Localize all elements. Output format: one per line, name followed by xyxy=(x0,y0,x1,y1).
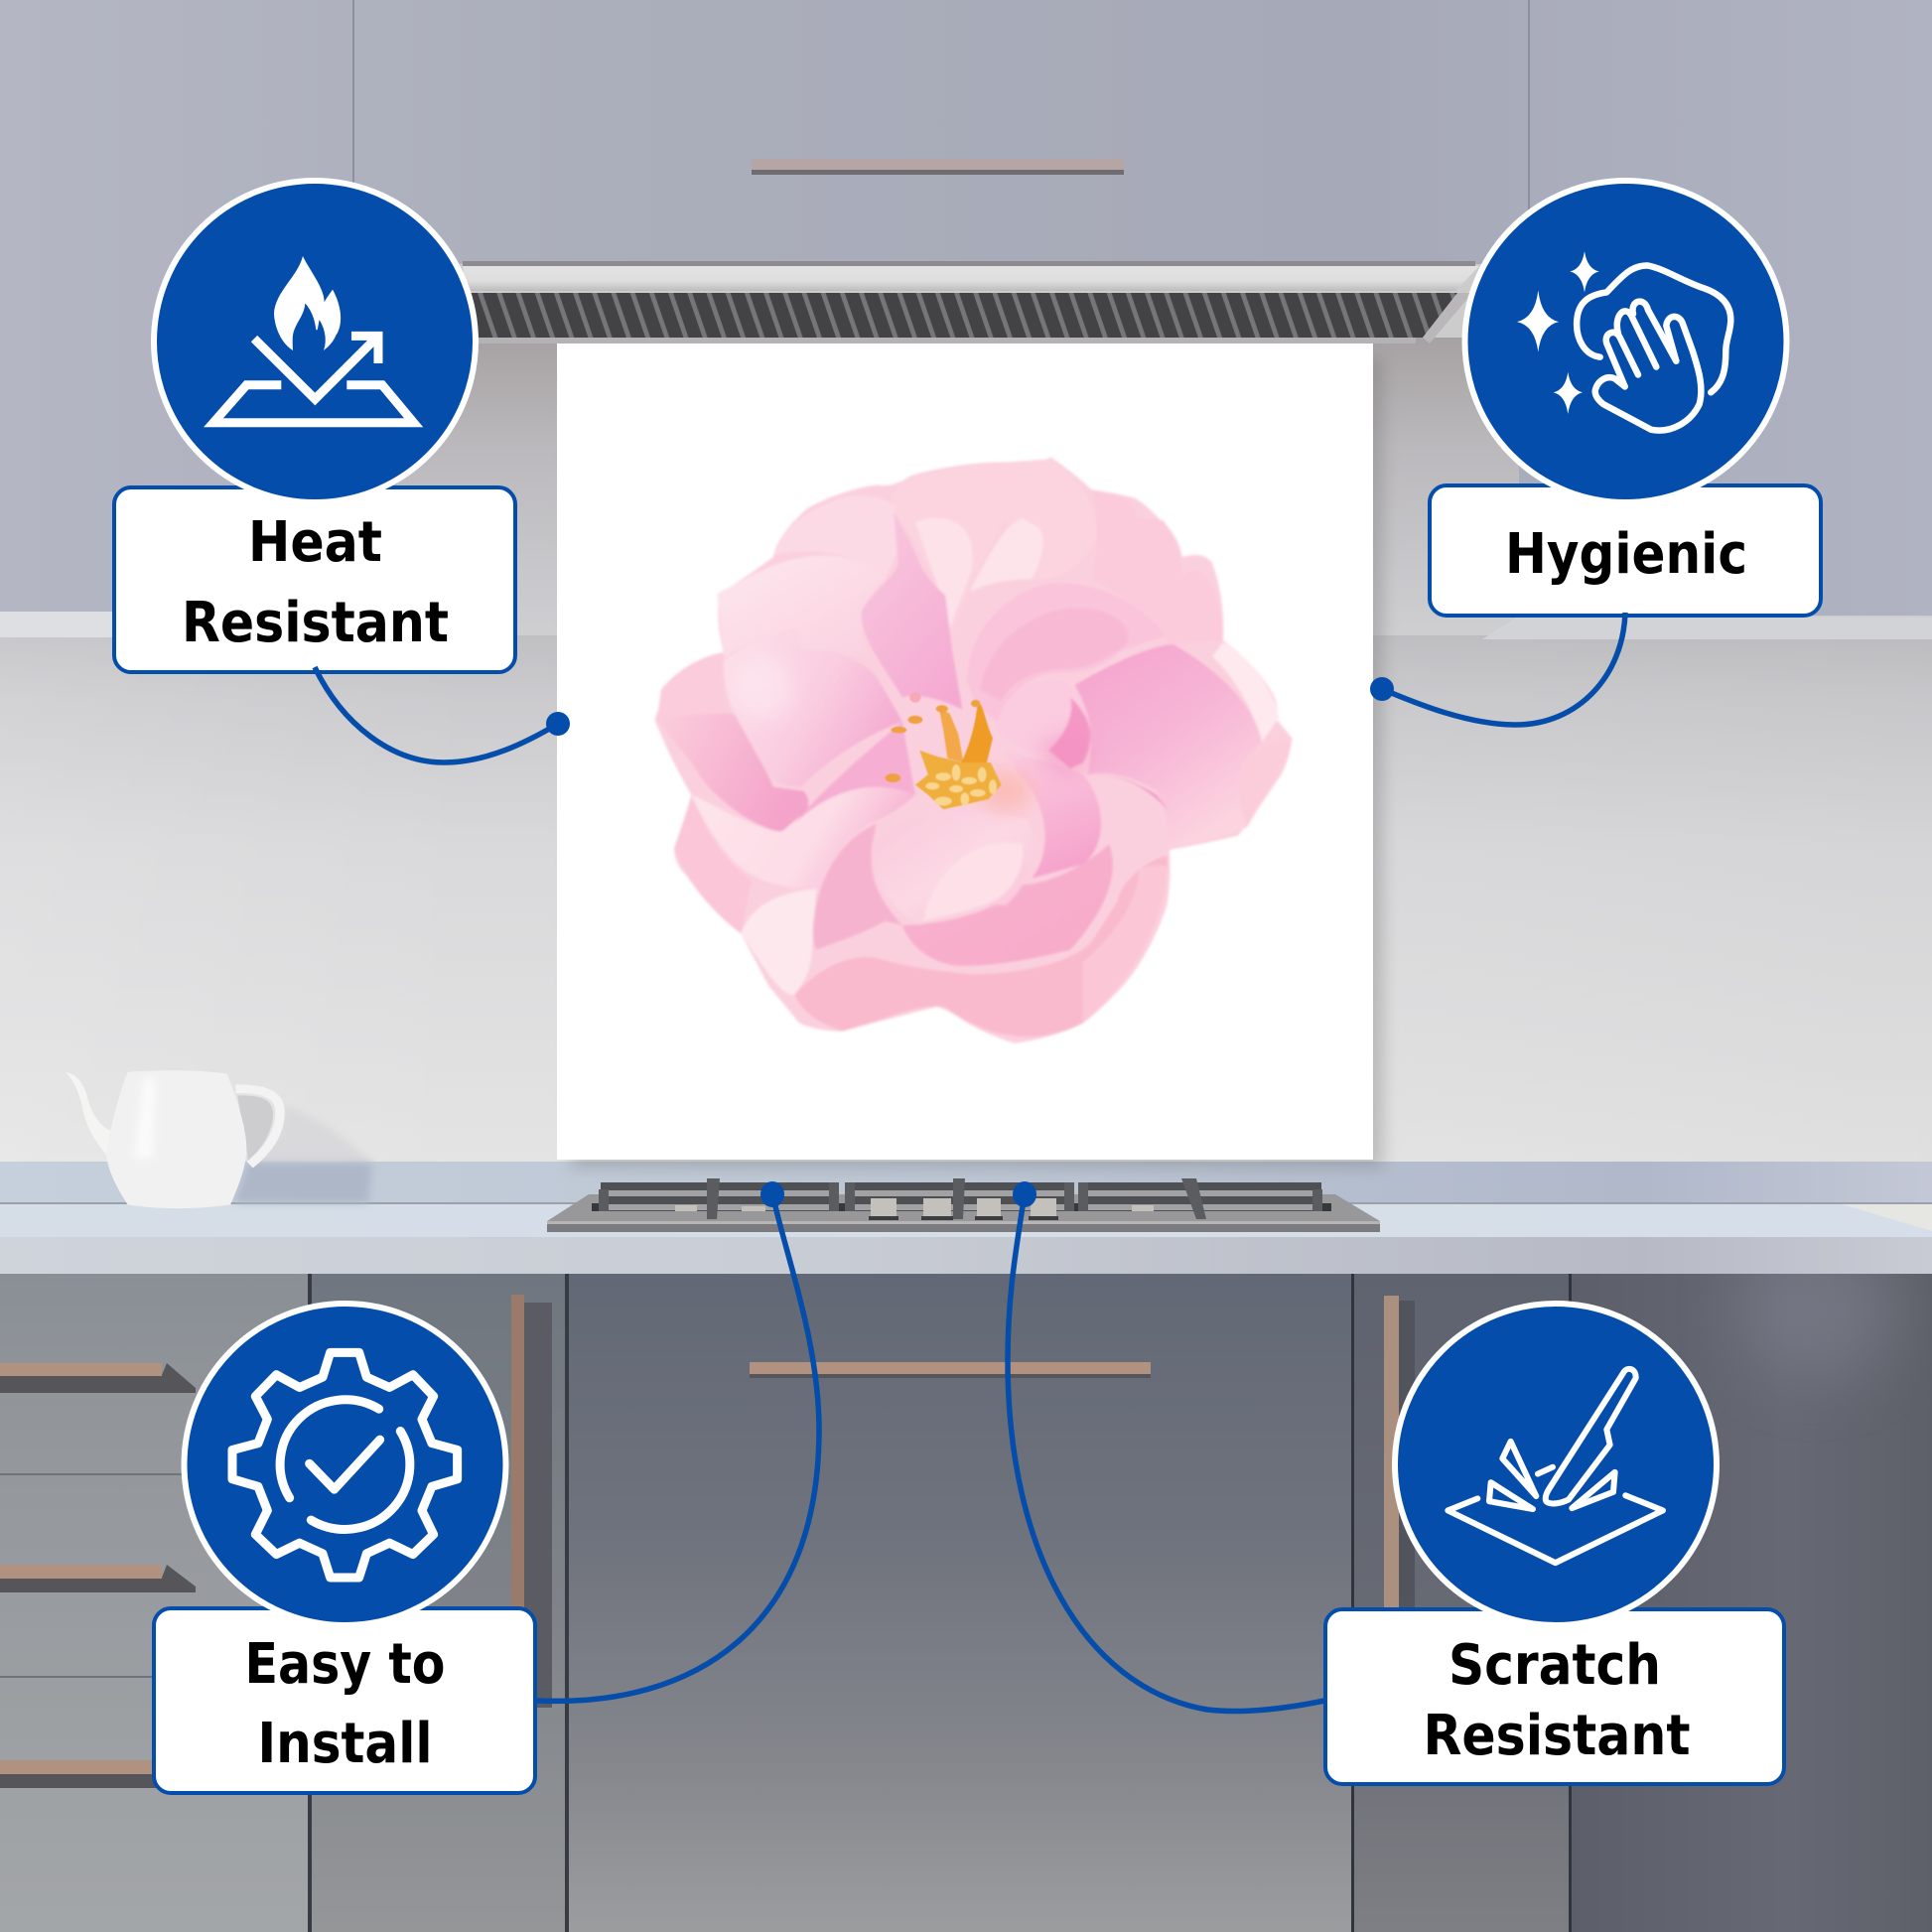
wall xyxy=(0,338,1932,1167)
badge circle xyxy=(185,1304,506,1625)
label box xyxy=(114,487,515,672)
cabinet handles xyxy=(0,1295,1415,1788)
icon: knife scratching a surface xyxy=(1448,1369,1663,1563)
feature: Scratch Resistant xyxy=(1008,1181,1784,1784)
badge circle xyxy=(154,181,476,502)
connector dot xyxy=(546,712,570,736)
lower cabinets xyxy=(0,1241,1932,1932)
label text: Heat xyxy=(248,510,382,575)
teapot xyxy=(66,1070,372,1208)
worktop xyxy=(0,1162,1932,1274)
cabinet under-strips xyxy=(0,612,1932,639)
label text: Resistant xyxy=(1424,1704,1690,1768)
pink flower xyxy=(655,457,1292,1043)
icon: flame over bent surface with arrow xyxy=(213,256,414,423)
icon: gear with checkmark xyxy=(232,1352,458,1578)
hob xyxy=(547,1178,1380,1232)
label text xyxy=(182,510,449,655)
label text: Hygienic xyxy=(1505,522,1747,587)
label box xyxy=(154,1608,535,1793)
upper cabinet handle xyxy=(752,159,1124,175)
label text xyxy=(1424,1633,1690,1768)
connector line xyxy=(1382,613,1625,725)
badge circle xyxy=(1395,1304,1717,1625)
feature: Easy to Install xyxy=(154,1181,819,1793)
feature: Heat Resistant xyxy=(114,181,570,762)
stamens xyxy=(886,692,1002,809)
connector dot xyxy=(760,1181,784,1207)
connector line xyxy=(537,1193,819,1701)
label text: Scratch xyxy=(1449,1633,1661,1698)
white panel xyxy=(557,344,1373,1160)
upper cabinets xyxy=(0,0,1932,616)
icon: hand wiping with sparkles xyxy=(1517,251,1730,431)
connector line xyxy=(1008,1193,1324,1712)
connector dot xyxy=(1013,1181,1036,1207)
connector dot xyxy=(1370,677,1394,701)
splashback panel xyxy=(557,344,1373,1160)
label text xyxy=(244,1632,445,1776)
connector line xyxy=(315,667,558,762)
label text: Install xyxy=(258,1712,433,1776)
label box xyxy=(1325,1609,1784,1784)
feature: Hygienic xyxy=(1370,181,1821,725)
label box xyxy=(1430,485,1821,616)
extractor hood xyxy=(463,261,1479,344)
badge circle xyxy=(1465,181,1787,502)
label text: Easy to xyxy=(244,1632,445,1697)
splashback shadow xyxy=(571,357,1383,1168)
label text: Resistant xyxy=(182,591,449,655)
